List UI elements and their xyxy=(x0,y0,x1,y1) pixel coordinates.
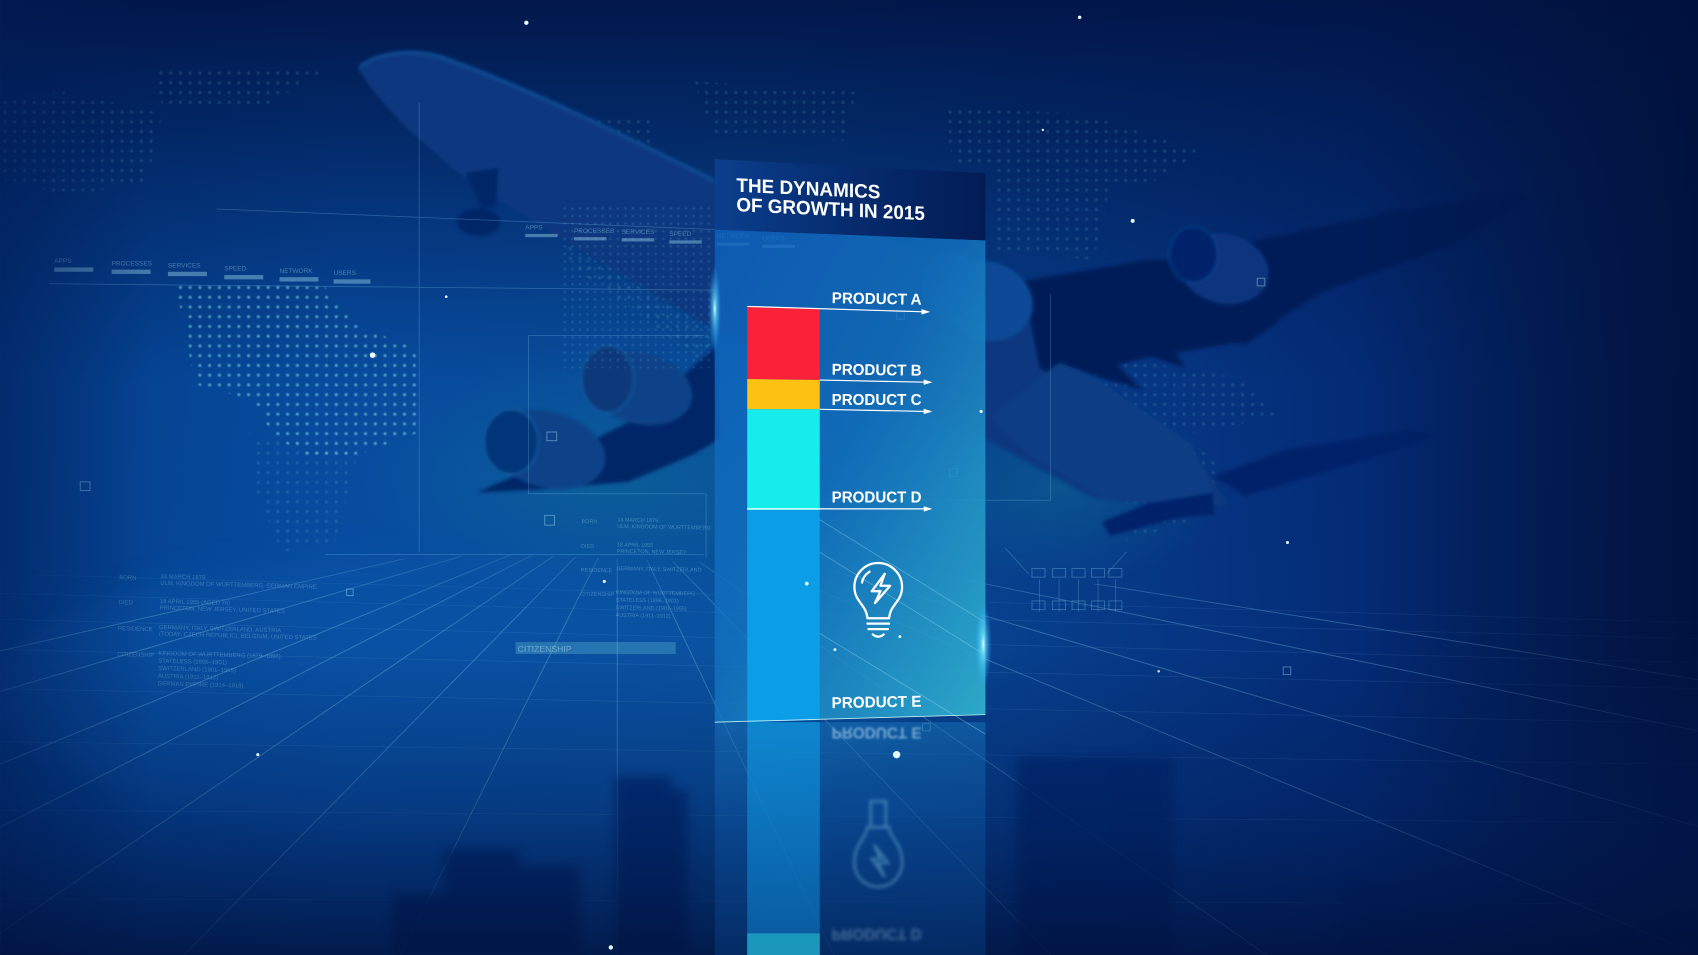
network boxes: right xyxy=(1032,568,1122,610)
label bars: left: SPEED xyxy=(224,266,247,273)
biography text: centre: DIED xyxy=(581,544,594,550)
bar: product b xyxy=(747,379,820,409)
map dots over plane xyxy=(563,206,715,368)
label bars: centre xyxy=(525,225,795,248)
city silhouette xyxy=(392,757,1516,955)
biography text: centre: CITIZENSHIP xyxy=(580,592,614,598)
biography text: left: GERMAN EMPIRE (1914–1918) xyxy=(158,681,243,690)
biography text: centre: SWITZERLAND (1901–1955) xyxy=(616,605,687,612)
plane: fuselage top highlight xyxy=(360,52,715,181)
citizenship highlight bar: CITIZENSHIP xyxy=(518,644,572,654)
biography text: left: PRINCETON, NEW JERSEY, UNITED STATES xyxy=(160,606,285,615)
plane: tail stabilizer lower xyxy=(1102,493,1215,536)
label bars: left: NETWORK xyxy=(279,268,313,275)
panel bottom edge xyxy=(715,715,985,722)
biography text: centre: RESIDENCE xyxy=(581,568,613,574)
label bars: centre: NETWORK xyxy=(717,233,751,240)
biography text: centre: ULM, KINGDOM OF WÜRTTEMBERG xyxy=(617,523,711,532)
label bars: centre: APPS xyxy=(525,225,543,232)
label: product a: PRODUCT A xyxy=(832,290,922,309)
citizenship highlight bar xyxy=(516,642,676,654)
biography text: centre: 18 APRIL 1955 xyxy=(617,542,653,549)
reflection: panel body xyxy=(715,722,985,955)
reflection: blue bar xyxy=(747,722,820,955)
label: product d: PRODUCT D xyxy=(832,489,922,506)
biography text: left: (TODAY: CZECH REPUBLIC), BELGIUM, UNITED STATES xyxy=(159,632,317,642)
biography text: left: CITIZENSHIP xyxy=(117,652,154,659)
plane: near body engine xyxy=(923,249,1044,353)
label bars: left: PROCESSES xyxy=(112,260,153,267)
label bars: left: APPS xyxy=(54,258,72,265)
biography text: centre: BORN xyxy=(582,519,597,525)
label bars: left: SERVICES xyxy=(168,262,201,269)
label: product e: PRODUCT E xyxy=(831,694,922,712)
biography text: centre: GERMANY, ITALY, SWITZERLAND xyxy=(616,566,702,574)
panel header xyxy=(715,159,985,240)
plane: rear body xyxy=(991,363,1218,503)
label bars: centre: USERS xyxy=(762,235,785,242)
label bars: left xyxy=(54,258,370,284)
biography text: left: 18 APRIL 1955 (AGED 76) xyxy=(160,599,230,607)
arrow: product b xyxy=(820,380,932,385)
biography text: centre: AUSTRIA (1911–1912) xyxy=(616,613,671,620)
plane: tail stabilizer upper xyxy=(1213,431,1440,496)
bar: product a xyxy=(747,306,820,380)
reflection: product d label: PRODUCT D xyxy=(832,925,922,942)
plane: fuselage xyxy=(357,51,1229,509)
panel grid lines crossing xyxy=(820,520,985,734)
plane: inner engine xyxy=(577,339,700,436)
label bars: centre: SPEED xyxy=(669,231,692,238)
bar: product d xyxy=(747,510,820,722)
biography text: left: 14 MARCH 1879 xyxy=(160,574,206,581)
plane: near wing xyxy=(477,346,720,493)
biography text: left: GERMANY, ITALY, SWITZERLAND, AUSTRIA xyxy=(159,625,281,634)
sparkle points xyxy=(256,16,1289,950)
panel body xyxy=(715,230,985,722)
plane: far engine xyxy=(1169,223,1277,314)
arrow: product d xyxy=(747,506,932,512)
plane: far wing xyxy=(1007,193,1527,379)
small square markers xyxy=(80,278,1291,731)
airplane xyxy=(357,51,1527,536)
label bars: centre: PROCESSES xyxy=(574,228,615,235)
biography text: centre xyxy=(580,517,711,620)
biography text: left: ULM, KINGDOM OF WÜRTTEMBERG, GERMAN EMPIRE xyxy=(160,580,317,591)
biography text: centre: STATELESS (1896–1901) xyxy=(616,598,679,605)
interface overlay lines xyxy=(49,103,1126,612)
biography text: left: BORN xyxy=(119,575,136,582)
reflection: cyan bar xyxy=(747,933,820,955)
plane: landing gear xyxy=(457,168,500,236)
label: product b: PRODUCT B xyxy=(832,362,922,380)
biography text: centre: PRINCETON, NEW JERSEY xyxy=(617,549,687,556)
icon: light bulb xyxy=(854,563,902,637)
title: OF GROWTH IN 2015 xyxy=(736,194,925,225)
title: THE DYNAMICS xyxy=(736,175,880,204)
glow: panel right edge xyxy=(975,601,992,688)
reflection: product e label: PRODUCT E xyxy=(832,724,922,741)
biography text: left: DIED xyxy=(119,600,133,607)
biography text: centre: KINGDOM OF WÜRTTEMBERG xyxy=(616,589,695,597)
biography text: centre: 14 MARCH 1879 xyxy=(617,517,658,524)
biography text: left: SWITZERLAND (1901–1955) xyxy=(158,666,236,674)
ground grid xyxy=(0,554,1698,955)
plane: tail fins xyxy=(1072,309,1278,390)
biography text: left: RESIDENCE xyxy=(118,626,153,633)
reflection: bulb icon xyxy=(854,801,902,887)
arrow: product c xyxy=(820,409,932,414)
glow: panel left edge xyxy=(708,265,721,352)
title xyxy=(736,175,925,225)
biography text: left xyxy=(116,573,318,691)
infographic panel xyxy=(715,159,985,734)
label bars: centre: SERVICES xyxy=(622,229,655,236)
world map dots xyxy=(4,71,1274,552)
biography text: left: AUSTRIA (1911–1912) xyxy=(158,674,218,681)
reflection of panel on the floor xyxy=(715,722,985,955)
label: product c: PRODUCT C xyxy=(832,392,922,409)
arrow: product a xyxy=(747,306,930,315)
biography text: left: KINGDOM OF WÜRTTEMBERG (1879–1896) xyxy=(158,650,281,660)
label bars: left: USERS xyxy=(334,270,357,277)
biography text: left: STATELESS (1896–1901) xyxy=(158,659,227,666)
bar: product c xyxy=(747,409,820,510)
plane: outer engine xyxy=(480,397,614,501)
